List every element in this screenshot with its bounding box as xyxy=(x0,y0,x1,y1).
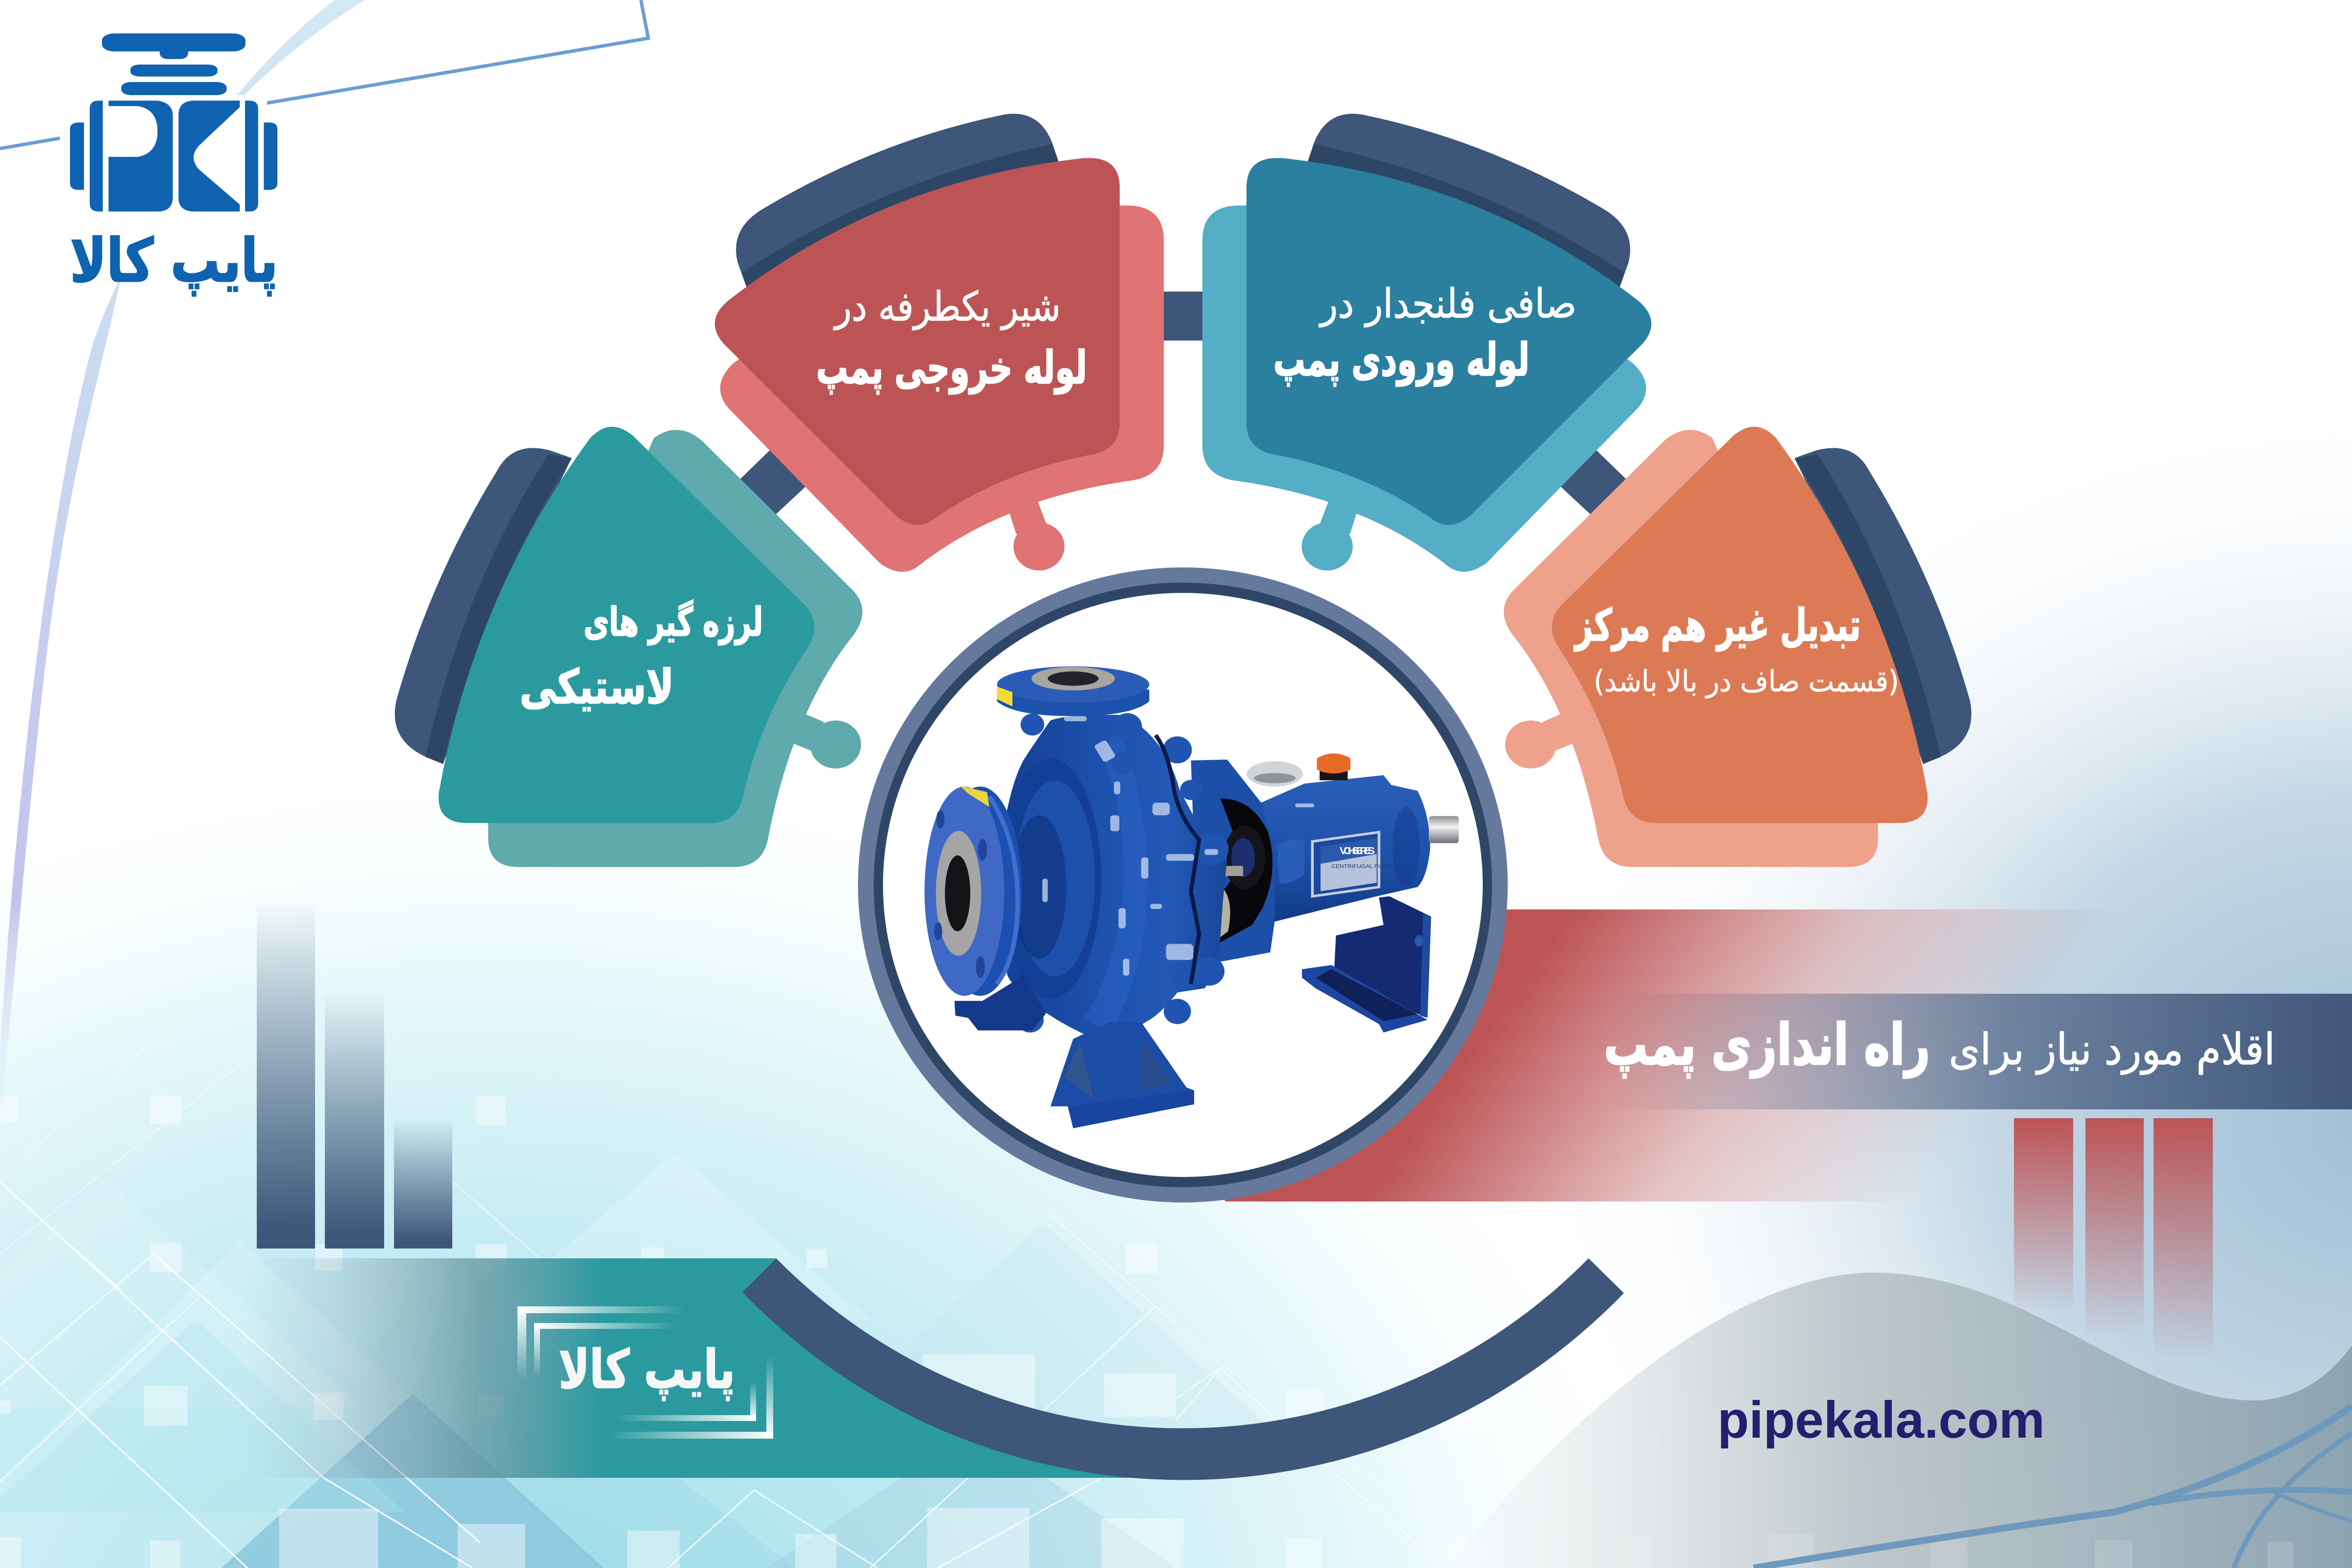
casing highlights xyxy=(1042,716,1314,976)
heading band xyxy=(1604,994,2352,1109)
bearing housing: CENTRIFUGAL PUMP xyxy=(1331,863,1392,869)
teal brand band xyxy=(245,1258,1142,1478)
label: red panel: شیر یکطرفه در xyxy=(833,284,1060,330)
logo wordmark: پایپ کالا xyxy=(70,226,278,296)
label: orange panel xyxy=(1574,600,1899,699)
discharge flange xyxy=(997,666,1149,716)
label: red panel: لوله خروجی پمپ xyxy=(816,342,1087,394)
casing xyxy=(999,713,1228,1043)
bearing housing xyxy=(1247,754,1459,922)
label: blue panel: صافی فلنجدار در xyxy=(1319,281,1577,327)
suction flange xyxy=(925,786,1022,996)
label: green panel xyxy=(519,599,763,714)
heading text: راه اندازی پمپ xyxy=(1604,1012,1930,1078)
panel: flanged strainer on inlet pipe (blue) xyxy=(1202,114,1651,572)
central ring xyxy=(858,567,1508,1202)
bearing housing: VCH SERIES xyxy=(1340,845,1375,857)
logo mark xyxy=(70,33,277,212)
decorative swoosh, top left xyxy=(0,0,365,1127)
navy arc below pump xyxy=(742,1258,1624,1480)
panel: rubber vibration dampers (green) xyxy=(395,427,862,867)
label: green panel: لرزه گیر های xyxy=(584,599,763,645)
logo xyxy=(60,33,278,296)
panel: eccentric reducer (orange) xyxy=(1504,427,1971,867)
brand frame xyxy=(517,1306,773,1439)
label: green panel: لاستیکی xyxy=(519,660,674,714)
decorative wave, bottom right xyxy=(1446,1273,2352,1568)
navy vertical bars xyxy=(257,900,452,1249)
label: blue panel: لوله ورودی پمپ xyxy=(1273,334,1530,387)
label: blue panel xyxy=(1273,281,1577,387)
pump illustration xyxy=(925,666,1459,1128)
adapter and opening xyxy=(1191,760,1275,962)
brand text: پایپ کالا xyxy=(559,1339,735,1400)
feet xyxy=(955,976,1194,1128)
decorative thin line, top left xyxy=(0,0,648,148)
red gradient band behind heading xyxy=(1225,909,2352,1201)
casing seam xyxy=(1155,735,1199,984)
panel: check valve on outlet pipe (red) xyxy=(715,114,1164,572)
label: orange panel: تبدیل غیر هم مرکز xyxy=(1574,600,1861,651)
label: red panel xyxy=(816,284,1087,394)
connectors between panels xyxy=(731,292,1635,523)
label: orange panel: (قسمت صاف در بالا باشد) xyxy=(1593,664,1899,699)
heading text: اقلام مورد نیاز برای xyxy=(1949,1024,2275,1075)
heading text xyxy=(1604,1012,2275,1078)
bracket xyxy=(1302,896,1431,1032)
red vertical bars xyxy=(2014,1118,2213,1359)
website url: pipekala.com xyxy=(1717,1391,2045,1449)
